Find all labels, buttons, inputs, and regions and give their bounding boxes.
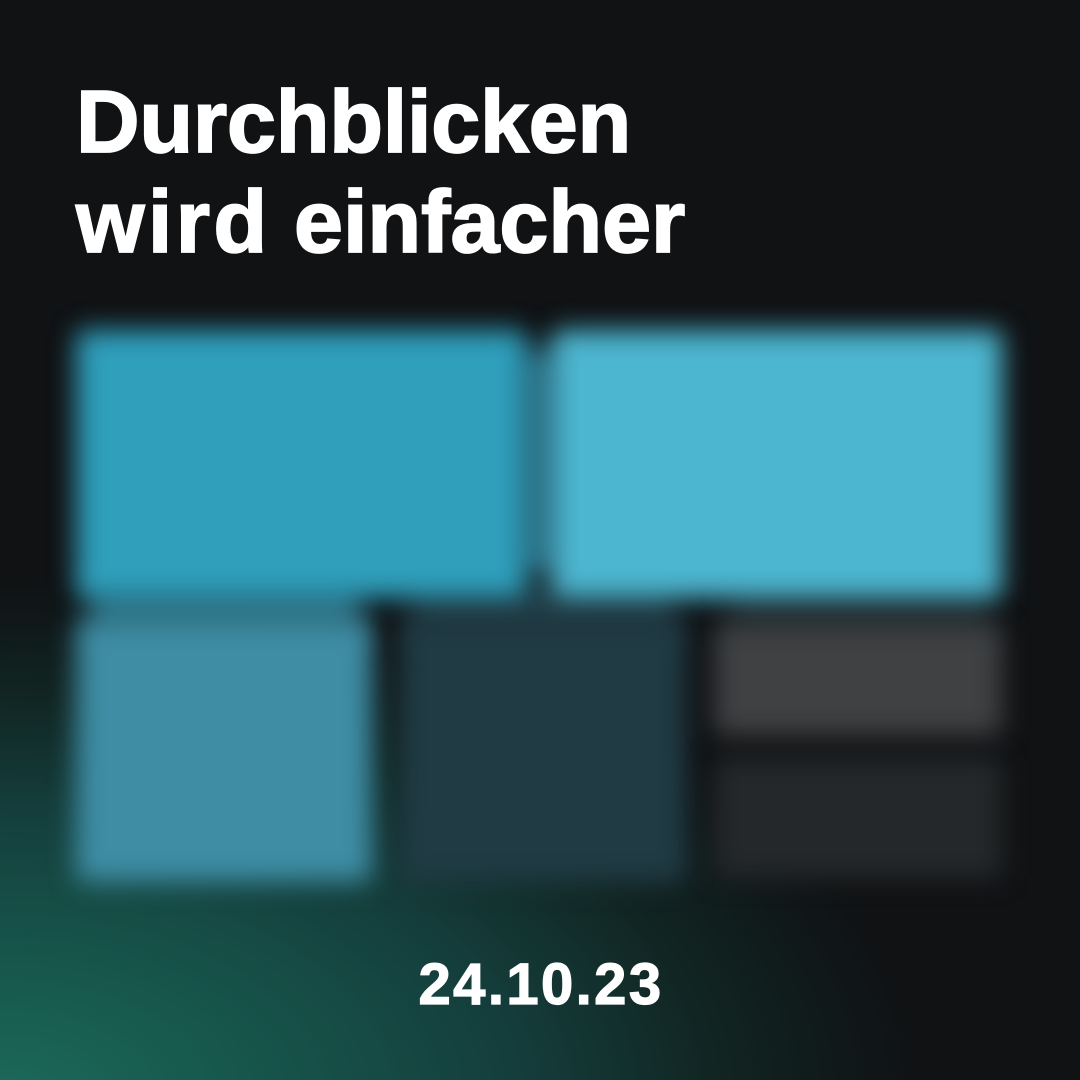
tile: top right bbox=[552, 330, 1002, 598]
tile: bottom right upper bbox=[714, 624, 1002, 736]
tile: top left bbox=[76, 330, 526, 598]
tile: bottom centre bbox=[400, 620, 686, 882]
title: wird bbox=[76, 172, 270, 271]
panel: blurred dashboard bbox=[56, 309, 1023, 900]
date: 24.10.23 bbox=[418, 952, 663, 1017]
title: einfacher bbox=[294, 172, 685, 271]
tile: bottom left bbox=[76, 620, 372, 882]
title bbox=[74, 72, 685, 271]
title: Durchblicken bbox=[76, 72, 631, 171]
tile: bottom right lower bbox=[714, 758, 1002, 878]
